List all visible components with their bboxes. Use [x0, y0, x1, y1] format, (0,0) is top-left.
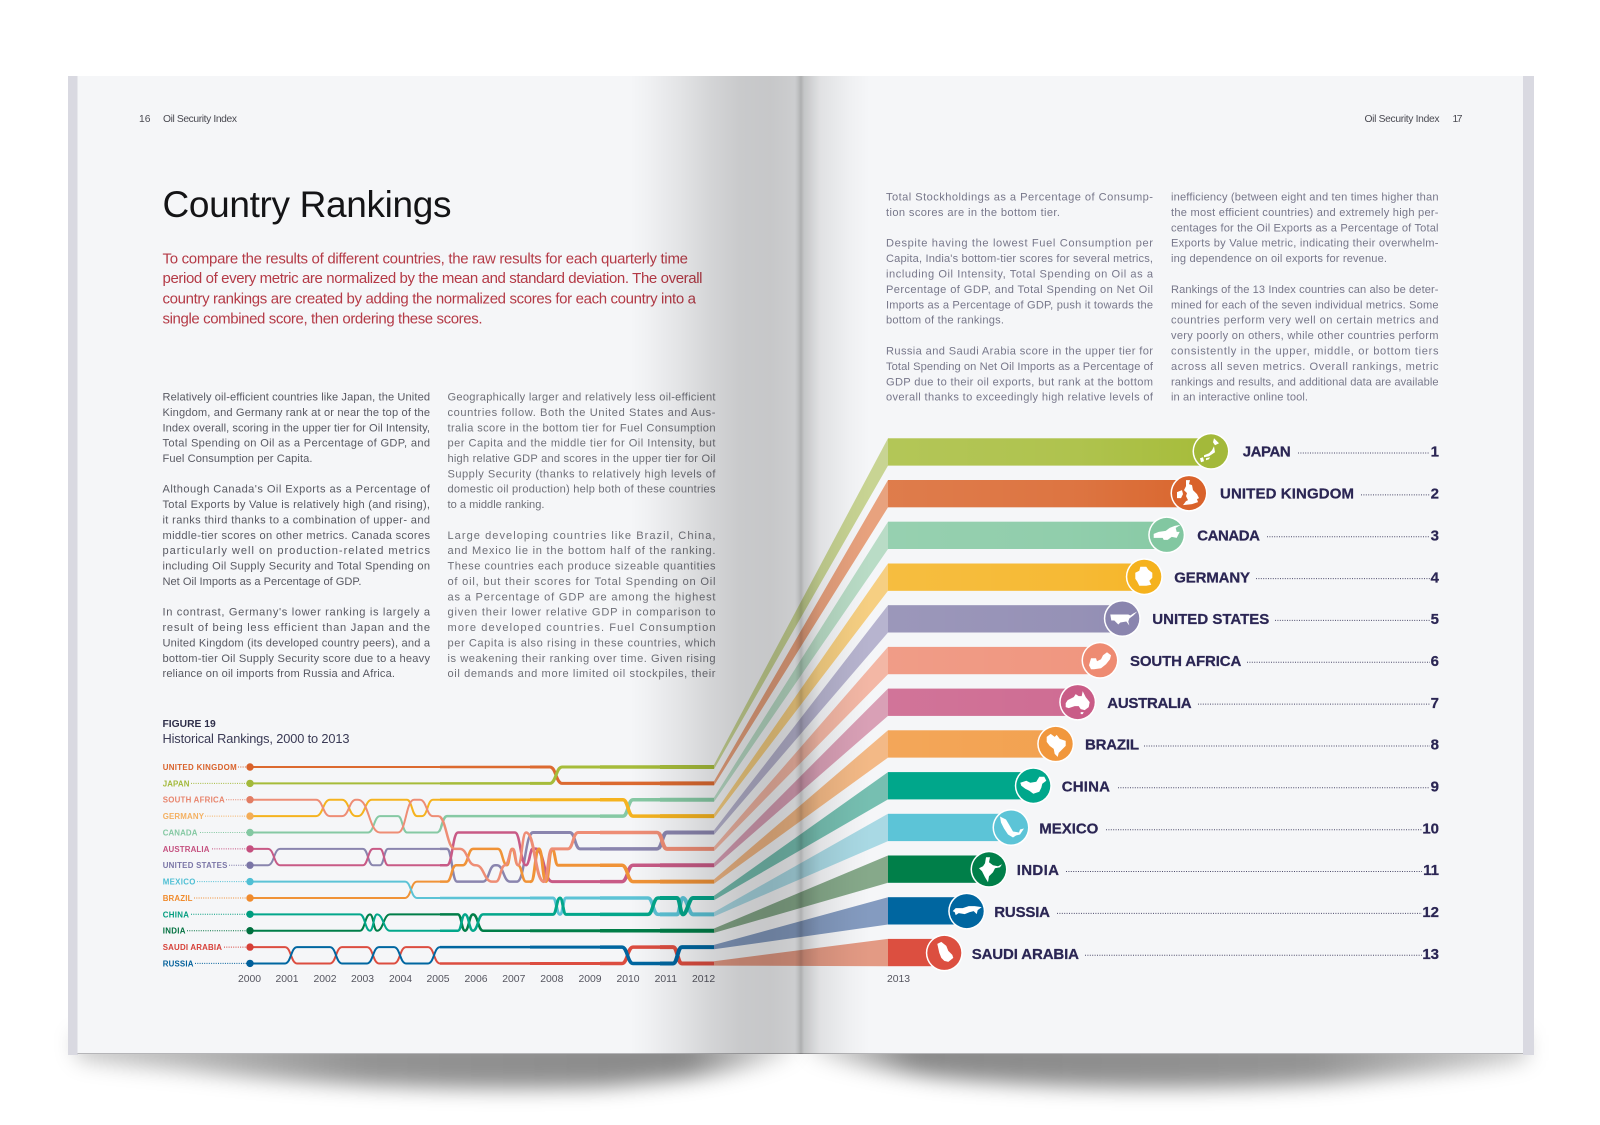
- left body column 1: Although Canada's Oil Exports as a Percentage of: [162, 484, 431, 496]
- left body column 1: Index overall, scoring in the upper tier for Oil Intensity,: [162, 422, 430, 434]
- icon: Saudi Arabia: [926, 934, 963, 971]
- rank 8: Brazil: [1085, 737, 1439, 754]
- right body column 2: rankings and results, and additional data are available: [1171, 376, 1438, 388]
- rank 10: Mexico: MEXICO: [1039, 820, 1099, 837]
- right body column 2: Rankings of the 13 Index countries can also be deter-: [1171, 284, 1439, 296]
- right body column 1: Capita, India's bottom-tier scores for several metrics,: [886, 253, 1153, 265]
- rank 4: Germany: 4: [1431, 569, 1440, 586]
- left body column 2: domestic oil production) help both of these countries: [448, 484, 716, 496]
- year axis labels: 2004: [389, 974, 412, 985]
- rank 11: India: INDIA: [1017, 862, 1059, 879]
- rank 7: Australia: 7: [1431, 695, 1439, 712]
- left body column 1: bottom-tier Oil Supply Security score due to a heavy: [162, 653, 430, 665]
- rank 5: United States: 5: [1431, 611, 1439, 628]
- year axis labels: [238, 974, 910, 985]
- right body column 1: Despite having the lowest Fuel Consumption per: [886, 238, 1153, 250]
- left body column 2: tralia score in the bottom tier for Fuel Consumption: [448, 422, 716, 434]
- icon: Germany: [1126, 558, 1163, 595]
- left body column 1: middle-tier scores on other metrics. Canada scores: [162, 530, 430, 542]
- ribbons connecting historical chart to 2013 ranking bars: [714, 438, 888, 966]
- rank 1: Japan: 1: [1431, 444, 1439, 461]
- right body column 1: bottom of the rankings.: [886, 315, 1004, 327]
- left body column 1: [162, 392, 431, 680]
- left body column 2: to a middle ranking.: [448, 499, 544, 511]
- rank 13: Saudi Arabia: SAUDI ARABIA: [972, 946, 1079, 963]
- left body column 2: per Capita and the middle tier for Oil Intensity, but: [448, 438, 715, 450]
- right body column 2: very poorly on others, while other countries perform: [1171, 330, 1438, 342]
- left body column 2: countries follow. Both the United States and Aus-: [448, 407, 716, 419]
- year axis labels: 2002: [313, 974, 337, 985]
- right body column 2: inefficiency (between eight and ten times higher than: [1171, 192, 1438, 204]
- right body column 2: in an interactive online tool.: [1171, 392, 1308, 404]
- icon: China: [1015, 767, 1052, 804]
- ranking rows: icons, names, leaders, numbers: [926, 433, 1440, 971]
- figure caption: Historical Rankings, 2000 to 2013: [162, 731, 350, 746]
- right body column 2: mined for each of the seven individual metrics. Some: [1171, 299, 1438, 311]
- right body column 1: including Oil Intensity, Total Spending on Oil as a: [886, 268, 1154, 280]
- rank 13: Saudi Arabia: 13: [1422, 946, 1439, 963]
- figure caption: [162, 719, 350, 746]
- rank 4: Germany: [1174, 569, 1440, 586]
- rank 1: Japan: [1243, 444, 1439, 461]
- right page edge stripe: [1523, 76, 1534, 1055]
- rank 2: United Kingdom: UNITED KINGDOM: [1220, 486, 1354, 503]
- icon: United Kingdom: [1170, 475, 1208, 512]
- book pages: [78, 76, 1523, 1054]
- left page header: 16: [139, 114, 151, 125]
- left body column 2: as a Percentage of GDP are among the highest: [448, 591, 715, 603]
- year axis labels: 2011: [655, 974, 677, 985]
- year axis labels: 2010: [616, 974, 640, 985]
- left body column 2: [448, 392, 716, 680]
- left body column 1: Total Spending on Oil as a Percentage of GDP, and: [162, 438, 430, 450]
- year axis labels: 2000: [238, 974, 261, 985]
- year axis labels: 2001: [275, 974, 299, 985]
- icon: Mexico: [992, 809, 1030, 846]
- right body column 2: ing dependence on oil exports for revenue.: [1171, 253, 1387, 265]
- right body column 1: Total Spending on Net Oil Imports as a Percentage of: [886, 361, 1154, 373]
- right body column 1: Total Stockholdings as a Percentage of Consump-: [886, 192, 1153, 204]
- left body column 2: given their lower relative GDP in comparison to: [448, 607, 716, 619]
- right body column 2: Exports by Value metric, indicating their overwhelm-: [1171, 238, 1439, 250]
- left body column 2: Supply Security (thanks to relatively high levels of: [448, 468, 716, 480]
- left body column 2: more developed countries. Fuel Consumption: [448, 622, 716, 634]
- intro paragraph: [162, 250, 702, 328]
- chart country labels with leaders and dots: UNITED KINGDOM: [163, 763, 237, 772]
- chart country labels with leaders and dots: UNITED STATES: [163, 861, 227, 870]
- rank 9: China: CHINA: [1062, 778, 1110, 796]
- figure caption: FIGURE 19: [162, 719, 216, 730]
- right body column 1: Imports as a Percentage of GDP, push it towards the: [886, 299, 1153, 311]
- rank 5: United States: [1152, 611, 1439, 628]
- icon: Russia: [948, 893, 985, 930]
- rank 2: United Kingdom: [1220, 486, 1439, 503]
- left body column 2: These countries each produce sizeable quantities: [448, 561, 716, 573]
- left body column 1: including Oil Supply Security and Total Spending on: [162, 561, 430, 573]
- icon: India: [970, 851, 1008, 888]
- left page edge stripe: [68, 76, 78, 1055]
- year axis labels: 2003: [351, 974, 374, 985]
- intro paragraph: country rankings are created by adding the normalized scores for each country into a: [162, 290, 697, 308]
- rank 2: United Kingdom: 2: [1431, 486, 1439, 503]
- rank 12: Russia: RUSSIA: [994, 904, 1050, 921]
- left body column 1: particularly well on production-related metrics: [162, 545, 430, 557]
- left body column 1: reliance on oil imports from Russia and Africa.: [162, 668, 395, 680]
- right body column 2: the most efficient countries) and extremely high per-: [1171, 207, 1439, 219]
- rank 9: China: 9: [1431, 778, 1439, 796]
- intro paragraph: period of every metric are normalized by the mean and standard deviation. The overall: [162, 270, 702, 287]
- page bottom edge: [78, 1053, 1523, 1054]
- rank 3: Canada: [1197, 527, 1439, 544]
- chart country labels with leaders and dots: AUSTRALIA: [163, 845, 210, 854]
- book drop shadow: right page: [808, 1035, 1528, 1088]
- intro paragraph: To compare the results of different countries, the raw results for each quarterly time: [162, 250, 688, 268]
- rank 6: South Africa: SOUTH AFRICA: [1130, 653, 1241, 670]
- chart country labels with leaders and dots: [163, 763, 254, 968]
- chart country labels with leaders and dots: CHINA: [163, 910, 189, 919]
- rank 7: Australia: AUSTRALIA: [1107, 695, 1192, 712]
- right body column 1: tion scores are in the bottom tier.: [886, 207, 1060, 219]
- book drop shadow: left page: [72, 1035, 795, 1088]
- left body column 2: is weakening their ranking over time. Given rising: [448, 653, 716, 665]
- rank 6: South Africa: [1130, 653, 1439, 670]
- left body column 2: Large developing countries like Brazil, China,: [448, 530, 716, 542]
- chart country labels with leaders and dots: SOUTH AFRICA: [163, 796, 225, 805]
- rank 6: South Africa: 6: [1431, 653, 1439, 670]
- chart country labels with leaders and dots: RUSSIA: [163, 959, 194, 968]
- rank 3: Canada: 3: [1431, 527, 1439, 544]
- chart country labels with leaders and dots: GERMANY: [163, 812, 205, 821]
- chart country labels with leaders and dots: JAPAN: [163, 779, 190, 788]
- left body column 1: Relatively oil-efficient countries like Japan, the United: [162, 392, 430, 403]
- rank 7: Australia: [1107, 695, 1439, 712]
- right page header: Oil Security Index: [1364, 114, 1440, 125]
- left body column 2: oil demands and more limited oil stockpiles, their: [448, 668, 716, 680]
- title: Country Rankings: [162, 184, 452, 225]
- left body column 1: United Kingdom (its developed country peers), and a: [162, 637, 431, 649]
- year axis labels: 2008: [540, 974, 564, 985]
- chart country labels with leaders and dots: MEXICO: [163, 878, 195, 887]
- left page header: Oil Security Index: [163, 114, 238, 125]
- chart country labels with leaders and dots: INDIA: [163, 927, 186, 936]
- right body column 1: Percentage of GDP, and Total Spending on Net Oil: [886, 284, 1153, 296]
- year axis labels: 2005: [426, 974, 450, 985]
- historical rankings bump chart lines: [250, 767, 714, 963]
- rank 9: China: [1062, 778, 1439, 796]
- left body column 2: high relative GDP and scores in the upper tier for Oil: [448, 453, 715, 465]
- chart country labels with leaders and dots: BRAZIL: [163, 894, 193, 903]
- rank 3: Canada: CANADA: [1197, 527, 1260, 544]
- left body column 2: per Capita is also rising in these countries, which: [448, 637, 716, 649]
- left body column 2: Geographically larger and relatively less oil-efficient: [448, 392, 715, 403]
- icon: Japan: [1192, 433, 1230, 470]
- rank 13: Saudi Arabia: [972, 946, 1439, 963]
- left body column 2: of oil, but their scores for Total Spending on Oil: [448, 576, 715, 588]
- icon: Canada: [1148, 516, 1185, 553]
- left body column 2: and Mexico lie in the bottom half of the ranking.: [448, 545, 715, 557]
- rank 11: India: [1017, 862, 1439, 879]
- right body column 1: Russia and Saudi Arabia score in the upper tier for: [886, 346, 1153, 358]
- chart country labels with leaders and dots: SAUDI ARABIA: [163, 943, 222, 952]
- gutter shading across the spine: [620, 76, 880, 1054]
- year axis labels: 2007: [502, 974, 526, 985]
- right body column 1: [886, 192, 1154, 404]
- left body column 1: In contrast, Germany's lower ranking is largely a: [162, 607, 431, 619]
- right body column 2: across all seven metrics. Overall rankings, metric: [1171, 361, 1439, 373]
- rank 5: United States: UNITED STATES: [1152, 611, 1269, 628]
- icon: United States: [1104, 600, 1141, 637]
- rank 4: Germany: GERMANY: [1174, 569, 1250, 586]
- right page header: 17: [1452, 114, 1463, 125]
- icon: Australia: [1059, 684, 1096, 721]
- left body column 1: it ranks third thanks to a combination of upper- and: [162, 514, 430, 526]
- rank 1: Japan: JAPAN: [1243, 444, 1291, 461]
- rank 11: India: 11: [1423, 862, 1439, 879]
- icon: South Africa: [1082, 642, 1118, 679]
- year axis labels: 2006: [464, 974, 488, 985]
- left body column 1: Kingdom, and Germany rank at or near the top of the: [162, 407, 430, 419]
- chart country labels with leaders and dots: CANADA: [163, 828, 198, 838]
- rank 10: Mexico: [1039, 820, 1439, 837]
- right body column 2: centages for the Oil Exports as a Percentage of Total: [1171, 222, 1438, 234]
- right body column 2: [1171, 192, 1439, 404]
- rank 8: Brazil: 8: [1431, 737, 1439, 754]
- year axis labels: 2009: [578, 974, 602, 985]
- right body column 1: GDP due to their oil exports, but rank at the bottom: [886, 376, 1153, 388]
- rank 12: Russia: [994, 904, 1439, 921]
- right body column 1: overall thanks to exceedingly high relative levels of: [886, 392, 1154, 404]
- right body column 2: consistently in the upper, middle, or bottom tiers: [1171, 346, 1439, 358]
- intro paragraph: single combined score, then ordering these scores.: [162, 310, 482, 328]
- right body column 2: countries perform very well on certain metrics and: [1171, 315, 1438, 327]
- rank 8: Brazil: BRAZIL: [1085, 737, 1139, 754]
- left body column 1: Fuel Consumption per Capita.: [162, 453, 312, 465]
- year axis labels: 2013: [887, 974, 910, 985]
- left body column 1: result of being less efficient than Japan and the: [162, 622, 430, 634]
- year axis labels: 2012: [692, 974, 715, 985]
- rank 10: Mexico: 10: [1422, 820, 1439, 837]
- left body column 1: Total Exports by Value is relatively high (and rising),: [162, 499, 430, 511]
- rank 12: Russia: 12: [1422, 904, 1439, 921]
- icon: Brazil: [1037, 725, 1074, 762]
- left body column 1: Net Oil Imports as a Percentage of GDP.: [162, 576, 362, 588]
- 2013 ranking bars: [888, 438, 1211, 966]
